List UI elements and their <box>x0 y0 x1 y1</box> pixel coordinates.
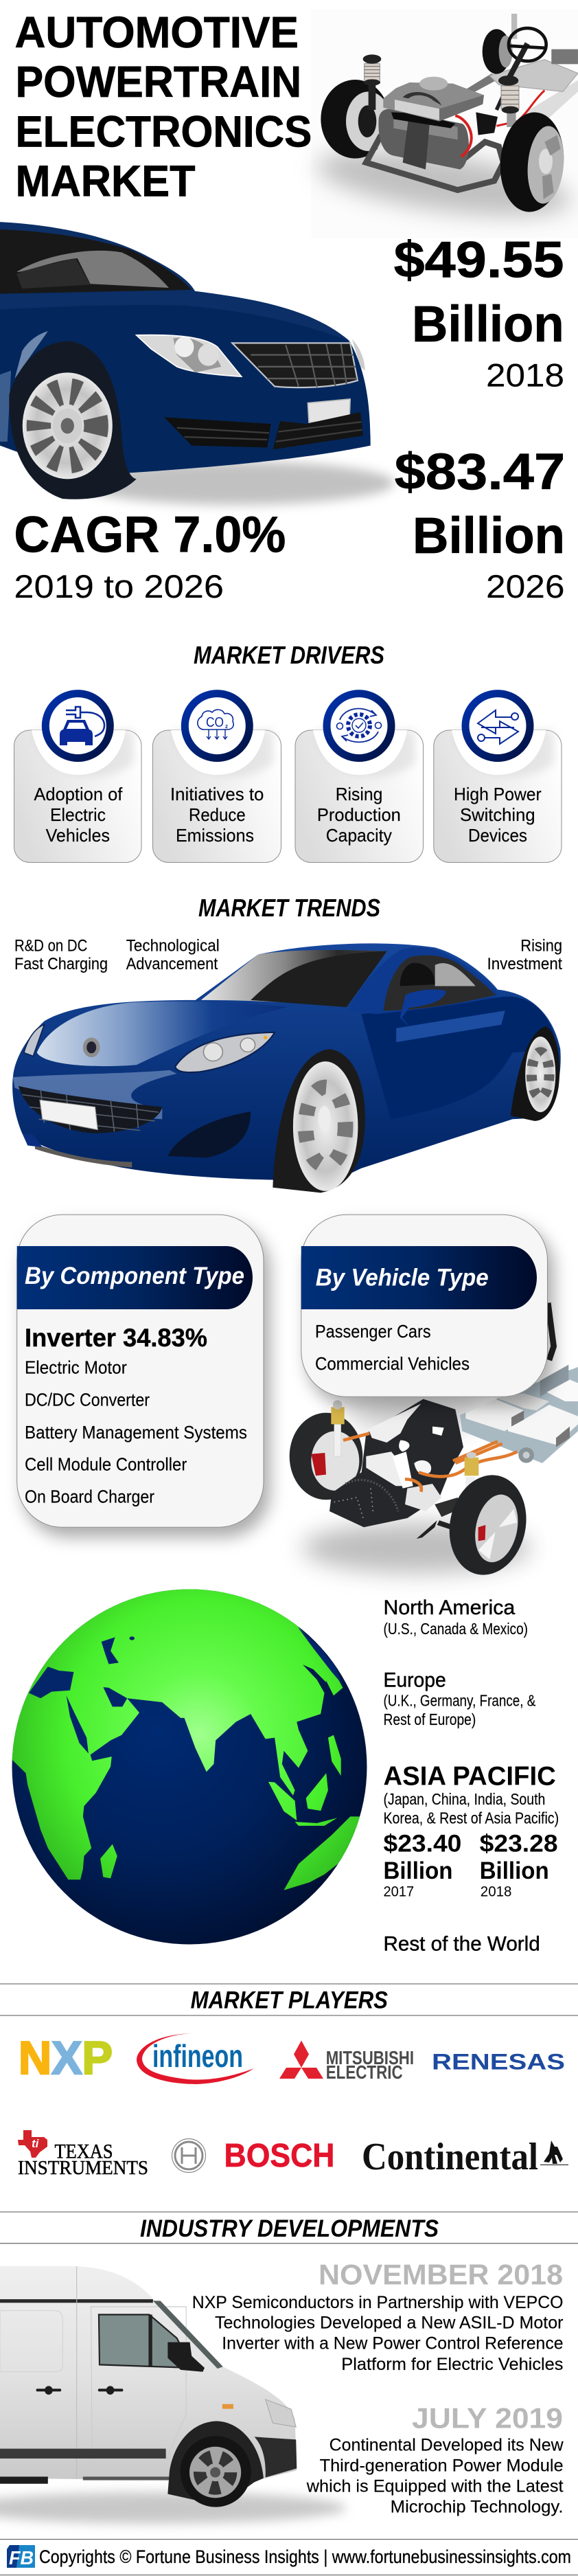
market size 2018 <box>394 231 564 394</box>
development: July 2019: which is Equipped with the Latest <box>306 2476 564 2496</box>
logo: Bosch <box>172 2138 335 2174</box>
icon: CO2 cloud <box>198 710 233 739</box>
orange hoses <box>343 1434 517 1492</box>
banner: by component type: By Component Type <box>25 1263 244 1289</box>
logo: Texas Instruments: ti <box>32 2137 40 2150</box>
land: Asia Africa Australia <box>0 1580 365 1890</box>
rear wheel and steering <box>483 28 547 78</box>
logo: Mitsubishi Electric: ELECTRIC <box>326 2061 403 2083</box>
development: July 2019: Continental Developed its New <box>330 2436 564 2455</box>
motor <box>378 109 469 170</box>
panel: driver 1 electric vehicles <box>14 694 141 863</box>
development: November 2018: Inverter with a New Power Control Reference <box>222 2334 563 2353</box>
right strut <box>498 76 519 127</box>
region: Asia Pacific: $23.28 <box>480 1830 558 1857</box>
logo: Texas Instruments <box>18 2130 148 2179</box>
van window <box>99 2301 223 2372</box>
banner: by vehicle type: By Vehicle Type <box>316 1264 489 1291</box>
panel: driver 3 production: Rising <box>336 784 382 804</box>
panel: by component type: Electric Motor <box>25 1357 127 1378</box>
CAGR: CAGR 7.0% <box>14 506 286 563</box>
panel: driver 1 electric vehicles: Adoption of <box>34 784 123 804</box>
side window <box>348 947 498 1014</box>
grille and plate <box>19 1086 162 1133</box>
image: engine and battery assembly <box>290 1303 578 1582</box>
panel: by component type: Battery Management Systems <box>25 1422 247 1443</box>
development: July 2019 <box>306 2402 564 2517</box>
panel: driver 3 production: Production <box>317 804 401 825</box>
panel: by vehicle type: Passenger Cars <box>315 1321 431 1342</box>
panel: driver 1 electric vehicles: Vehicles <box>46 825 110 846</box>
region: Europe: Rest of Europe) <box>383 1710 476 1728</box>
logo: Infineon <box>137 2033 254 2084</box>
seas: Mediterranean Black Red Caspian Gulf <box>29 1627 343 1754</box>
CAGR: 2019 to 2026 <box>14 568 224 605</box>
development: November 2018: Platform for Electric Vehicles <box>341 2355 563 2374</box>
heading: industry developments: INDUSTRY DEVELOPMENTS <box>140 2215 439 2242</box>
license plate <box>308 399 350 422</box>
panel: by component type: Inverter 34.83% <box>25 1324 207 1352</box>
icon: CO2 cloud: 2 <box>225 725 228 730</box>
region: Asia Pacific: ASIA PACIFIC <box>383 1761 556 1792</box>
van wheel <box>167 2421 264 2507</box>
region: North America: (U.S., Canada & Mexico) <box>383 1620 528 1638</box>
region: Asia Pacific: 2017 <box>383 1884 414 1899</box>
badge <box>83 1037 100 1057</box>
right spring strut <box>465 1452 478 1493</box>
van handles and stripe <box>0 2386 172 2484</box>
logo: NXP: NXP <box>19 2032 113 2084</box>
grille <box>232 343 358 387</box>
region: Europe: Europe <box>383 1669 446 1691</box>
front wheel sedan <box>9 341 137 499</box>
panel: driver 3 production <box>295 694 423 863</box>
sedan body <box>0 291 371 489</box>
image: blue sports car <box>12 943 561 1193</box>
trend labels <box>14 937 562 973</box>
development: July 2019: Third-generation Power Module <box>320 2456 564 2475</box>
development: November 2018 <box>192 2258 563 2374</box>
development: July 2019: JULY 2019 <box>412 2402 563 2434</box>
region: Asia Pacific: $23.40 <box>383 1830 461 1857</box>
region: North America <box>383 1596 528 1638</box>
sports car rear wheel <box>511 1026 559 1121</box>
inverter block <box>383 82 484 122</box>
lower grilles <box>164 412 363 449</box>
left tyre <box>290 1413 362 1500</box>
region: Europe: (U.K., Germany, France, & <box>383 1692 535 1710</box>
van bumper <box>255 2437 297 2478</box>
globe <box>0 1580 367 1944</box>
panel: by component type: On Board Charger <box>25 1487 154 1507</box>
title: ELECTRONICS <box>15 107 312 157</box>
logo: Fortune Business Insights: FB <box>9 2547 34 2568</box>
title <box>15 8 312 205</box>
title: AUTOMOTIVE <box>15 8 299 57</box>
region: North America: North America <box>383 1596 516 1619</box>
lower intake <box>167 1111 251 1157</box>
panel: by component type: Cell Module Controller <box>25 1454 187 1475</box>
red cables <box>455 91 544 157</box>
region: Asia Pacific <box>383 1761 559 1899</box>
region: Europe <box>383 1669 535 1728</box>
footer <box>0 2539 578 2575</box>
panel: driver 2 emissions: Reduce <box>189 804 246 825</box>
market size 2026 <box>395 443 565 605</box>
panel: by vehicle type <box>301 1214 548 1397</box>
trend labels: Rising <box>520 937 562 956</box>
trend labels: R&D on DC <box>14 937 87 956</box>
market size 2018: 2018 <box>486 357 564 394</box>
logo: Continental: Continental <box>362 2136 538 2178</box>
CAGR <box>14 506 286 605</box>
trend labels: Fast Charging <box>14 955 108 973</box>
headlight <box>175 1032 275 1072</box>
icon: plug and car <box>60 707 104 745</box>
van headlamp <box>266 2399 296 2427</box>
image: EV chassis with motor <box>311 9 578 238</box>
panel: driver 3 production: Capacity <box>326 825 392 846</box>
logo: Texas Instruments: INSTRUMENTS <box>18 2157 148 2179</box>
panel: by component type <box>17 1214 264 1527</box>
region: Asia Pacific: 2018 <box>481 1884 511 1899</box>
battery pack <box>460 1365 578 1463</box>
heading: market drivers: MARKET DRIVERS <box>194 641 384 669</box>
development: November 2018: NOVEMBER 2018 <box>319 2258 563 2290</box>
van body <box>0 2266 297 2481</box>
heading: market players: MARKET PLAYERS <box>191 1987 388 2014</box>
right front wheel <box>496 110 568 214</box>
market size 2026: Billion <box>413 507 565 564</box>
icon: switching arrows <box>478 710 518 744</box>
logo: Mitsubishi Electric: MITSUBISHI <box>326 2047 414 2068</box>
panel: driver 2 emissions: Initiatives to <box>170 784 264 804</box>
region: Rest of the World: Rest of the World <box>383 1933 540 1956</box>
development: November 2018: NXP Semiconductors in Partnership with VEPCO <box>192 2293 563 2312</box>
image: white van <box>0 2266 347 2524</box>
logo: Infineon: infineon <box>152 2038 243 2074</box>
hood highlight <box>37 1002 288 1066</box>
sports car front wheel <box>273 1049 365 1193</box>
panel: by vehicle type: Commercial Vehicles <box>315 1353 470 1374</box>
spring strut left <box>363 54 381 110</box>
sports car silhouette <box>12 943 561 1188</box>
development: November 2018: Technologies Developed a New ASIL-D Motor <box>215 2314 563 2333</box>
panel: driver 2 emissions: Emissions <box>176 825 254 846</box>
trend labels: Advancement <box>126 955 218 973</box>
banner: by vehicle type <box>301 1246 537 1309</box>
connector <box>476 112 498 135</box>
lower frame <box>366 137 503 190</box>
market size 2026: 2026 <box>486 568 564 605</box>
title: POWERTRAIN <box>15 57 301 106</box>
panel: driver 4 power switching: Devices <box>468 825 527 846</box>
mirror <box>400 989 446 1028</box>
trend labels: Investment <box>487 955 562 973</box>
panel: driver 1 electric vehicles: Electric <box>50 804 106 825</box>
left front wheel <box>321 80 391 159</box>
panel: driver 4 power switching: High Power <box>454 784 542 804</box>
banner: by component type <box>17 1246 253 1309</box>
image: dark blue sedan front <box>0 222 395 505</box>
region: Asia Pacific: Billion <box>480 1857 549 1884</box>
region: Asia Pacific: Billion <box>383 1857 453 1884</box>
development: July 2019: Microchip Technology. <box>391 2498 563 2517</box>
logo: Mitsubishi Electric <box>279 2040 414 2083</box>
market size 2018: $49.55 <box>394 231 564 289</box>
title: MARKET <box>15 156 195 205</box>
sedan roof and windshield <box>0 222 196 300</box>
headlight <box>137 335 242 376</box>
panel: driver 4 power switching <box>434 694 562 863</box>
panel: driver 4 power switching: Switching <box>460 804 535 825</box>
trend labels: Technological <box>126 937 220 956</box>
market size 2018: Billion <box>412 295 564 352</box>
regions text <box>383 1596 559 1956</box>
logo: Renesas: RENESAS <box>432 2050 565 2075</box>
region: Asia Pacific: (Japan, China, India, South <box>383 1790 545 1808</box>
left spring strut <box>331 1400 345 1456</box>
logo: Bosch: BOSCH <box>224 2138 335 2174</box>
windshield <box>201 950 383 1007</box>
panel: driver 2 emissions <box>152 694 281 863</box>
market size 2026: $83.47 <box>395 443 565 500</box>
engine block <box>330 1399 463 1539</box>
icon: gear with arrows <box>336 709 382 742</box>
right tyre <box>441 1468 535 1582</box>
icon: CO2 cloud: CO <box>206 715 224 730</box>
panel: by component type: DC/DC Converter <box>25 1389 150 1410</box>
logo: Texas Instruments: TEXAS <box>55 2140 113 2163</box>
heading: market trends: MARKET TRENDS <box>198 894 380 922</box>
